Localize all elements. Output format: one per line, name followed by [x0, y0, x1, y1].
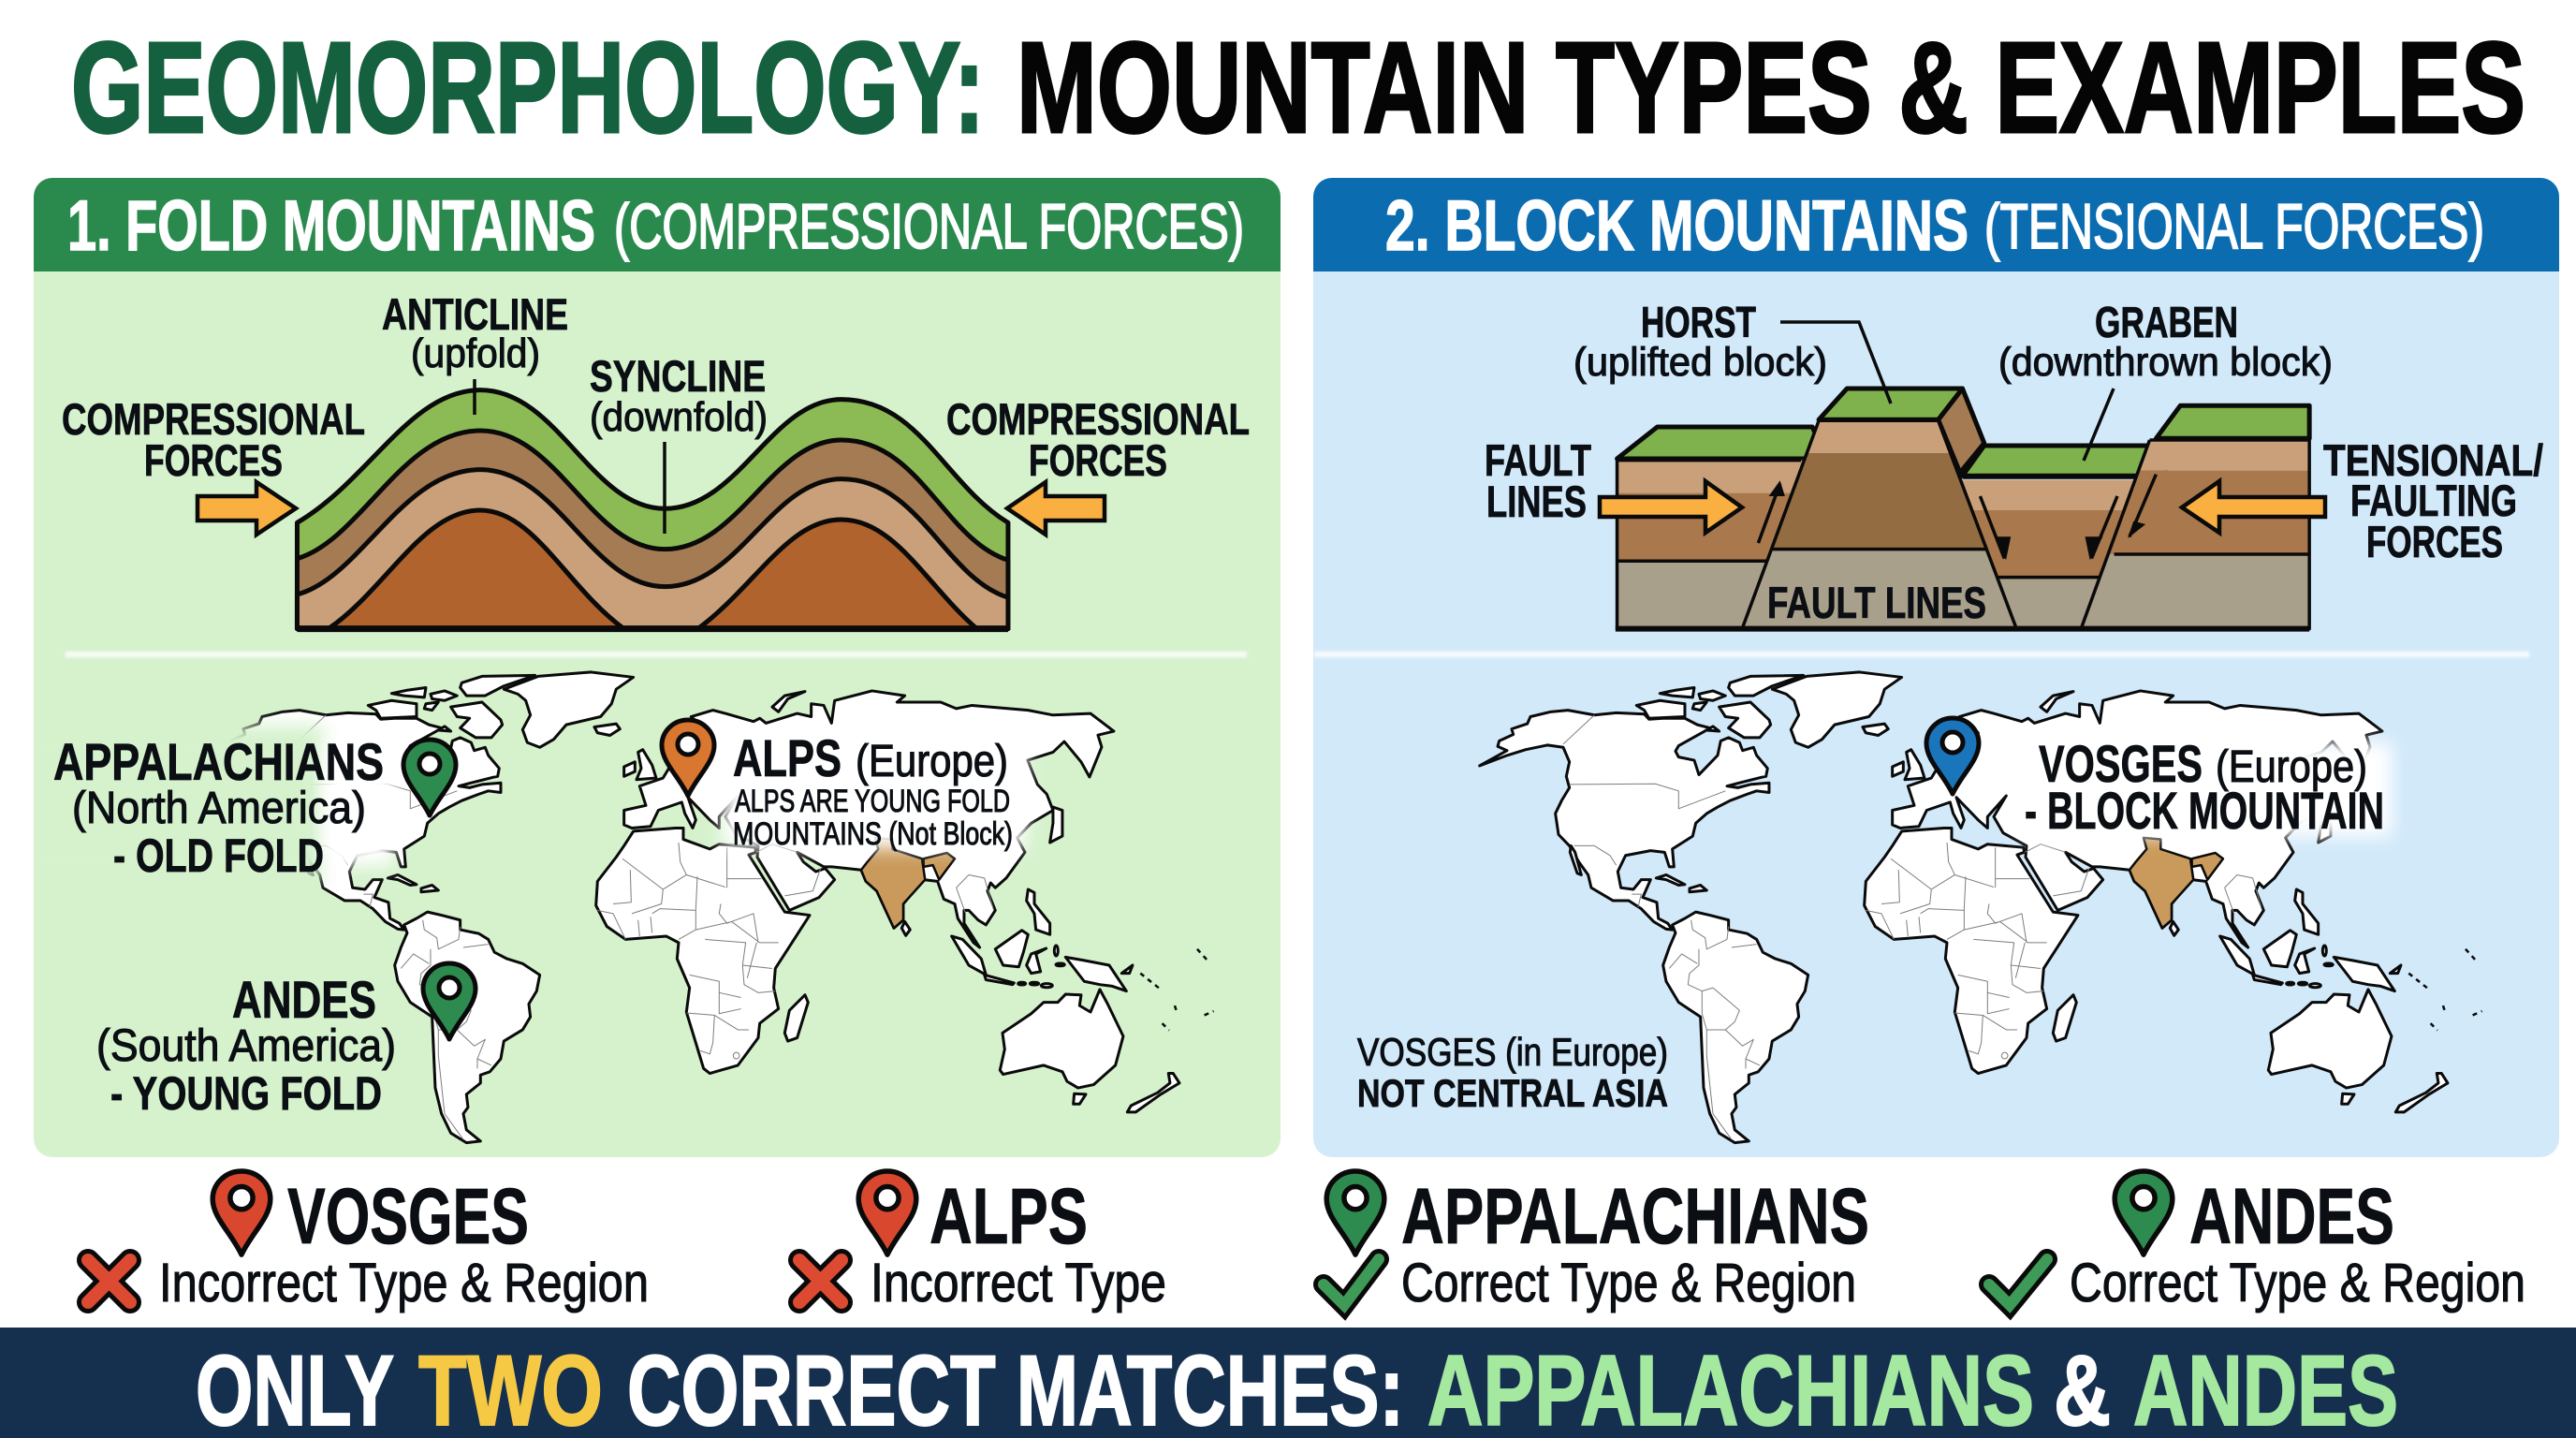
label: Andes: - YOUNG FOLD: [110, 1067, 382, 1120]
graben label: [1998, 298, 2333, 461]
result: Vosges: [88, 1171, 649, 1313]
label: Andes: [96, 970, 396, 1120]
label: Appalachians: [53, 732, 384, 882]
right compressional forces label: [946, 394, 1250, 485]
fault arrows: [1758, 475, 2156, 560]
block panel header: 2. BLOCK MOUNTAINS: [1385, 186, 1969, 266]
divider: [1314, 652, 2529, 657]
syncline label: (downfold): [590, 394, 768, 440]
icon: green pin: [1326, 1171, 1384, 1255]
left block: [1617, 427, 1827, 629]
label: Appalachians: (North America): [72, 784, 366, 833]
world map outlines: [1480, 672, 2482, 1143]
result: Alps: [799, 1171, 1166, 1313]
horst label: HORST: [1641, 298, 1756, 346]
pin: Appalachians: [403, 740, 456, 815]
icon: green check: [1324, 1259, 1379, 1305]
anticline label: ANTICLINE: [382, 289, 568, 339]
result: Andes: ANDES: [2189, 1172, 2394, 1260]
label: Alps: MOUNTAINS (Not Block): [733, 816, 1013, 852]
arrow: left compression: [198, 482, 296, 535]
left compressional forces label: COMPRESSIONAL: [62, 394, 365, 444]
result: Alps: Incorrect Type: [871, 1253, 1166, 1313]
icon: red cross: [88, 1260, 130, 1302]
anticline label: (upfold): [411, 330, 540, 376]
note: Vosges not Central Asia: [1357, 1030, 1668, 1115]
block mountain cross-section: [1616, 389, 2309, 629]
arrow: right compression: [1007, 482, 1105, 535]
icon: red pin: [212, 1171, 271, 1255]
label: Appalachians: - OLD FOLD: [113, 829, 324, 882]
world map: block panel: [1480, 672, 2482, 1143]
right block: [2081, 405, 2309, 629]
note: Vosges not Central Asia: VOSGES (in Europe): [1357, 1030, 1668, 1074]
graben block: [1939, 446, 2166, 629]
Europe, Africa and Asia: [1865, 691, 2382, 1074]
block panel header: [1313, 178, 2559, 271]
anticline label: [382, 289, 568, 415]
result: Vosges: VOSGES: [287, 1172, 529, 1260]
horst label: (uplifted block): [1573, 340, 1827, 385]
fault lines label: LINES: [1486, 477, 1587, 526]
icon: red cross: [799, 1260, 842, 1302]
fold panel header: [34, 178, 1281, 271]
label: Alps: (Europe): [856, 737, 1008, 786]
fault lines label: FAULT: [1485, 435, 1591, 485]
icon: red pin: [858, 1171, 916, 1255]
panel: block mountains: [1313, 178, 2559, 1157]
bottom banner: [0, 1328, 2576, 1438]
divider: [66, 652, 1247, 657]
result: Appalachians: APPALACHIANS: [1401, 1172, 1869, 1260]
pin: Andes: [423, 963, 476, 1039]
world map: fold panel: [230, 670, 1215, 1144]
left compressional forces label: [62, 394, 365, 485]
result: Vosges: Incorrect Type & Region: [159, 1253, 649, 1313]
fault lines inner label: FAULT LINES: [1767, 578, 1986, 627]
tensional forces label: FORCES: [2366, 517, 2503, 566]
tensional forces label: FAULTING: [2350, 476, 2517, 525]
result: Andes: [1989, 1171, 2525, 1313]
title: [71, 16, 2525, 160]
India highlight: [2130, 838, 2193, 928]
syncline label: SYNCLINE: [590, 351, 766, 401]
label: Vosges: (Europe): [2216, 742, 2367, 792]
Americas and Greenland: [1480, 672, 1902, 1143]
islands and Australia: [2220, 889, 2482, 1112]
result: Alps: ALPS: [929, 1172, 1088, 1260]
label: Vosges: - BLOCK MOUNTAIN: [2025, 781, 2384, 840]
fold panel header: 1. FOLD MOUNTAINS: [67, 186, 595, 266]
label: Alps: ALPS: [733, 728, 842, 787]
graben label: (downthrown block): [1998, 340, 2333, 385]
right compressional forces label: FORCES: [1029, 435, 1167, 485]
horst block: [1742, 389, 2016, 629]
syncline label: [590, 351, 768, 534]
title: GEOMORPHOLOGY:: [71, 16, 985, 160]
label: Alps: ALPS ARE YOUNG FOLD: [735, 784, 1010, 819]
label: Andes: (South America): [96, 1021, 396, 1071]
panel: fold mountains: [19, 178, 1281, 1157]
tensional forces label: [2323, 435, 2543, 566]
icon: green check: [1989, 1259, 2047, 1305]
note: Vosges not Central Asia: NOT CENTRAL ASIA: [1357, 1071, 1668, 1115]
fault lines label: [1485, 435, 1591, 526]
icon: green pin: [2115, 1171, 2173, 1255]
label: Vosges: VOSGES: [2039, 734, 2203, 793]
arrow: left tension: [1600, 481, 1742, 533]
fold panel header: (COMPRESSIONAL FORCES): [614, 191, 1244, 262]
right compressional forces label: COMPRESSIONAL: [946, 394, 1250, 444]
pin: Vosges: [1926, 718, 1979, 794]
label: Andes: ANDES: [232, 970, 376, 1029]
fold mountain cross-section: [297, 390, 1008, 629]
label: Vosges: [2025, 734, 2384, 840]
arrow: right tension: [2182, 481, 2325, 533]
result: Appalachians: [1324, 1171, 1869, 1313]
result: Appalachians: Correct Type & Region: [1401, 1253, 1856, 1313]
graben label: GRABEN: [2095, 298, 2238, 346]
label: Appalachians: APPALACHIANS: [53, 732, 384, 791]
left compressional forces label: FORCES: [144, 435, 283, 485]
horst label: [1573, 298, 1891, 404]
label: Alps: [733, 728, 1013, 852]
pin: Alps: [662, 720, 714, 796]
